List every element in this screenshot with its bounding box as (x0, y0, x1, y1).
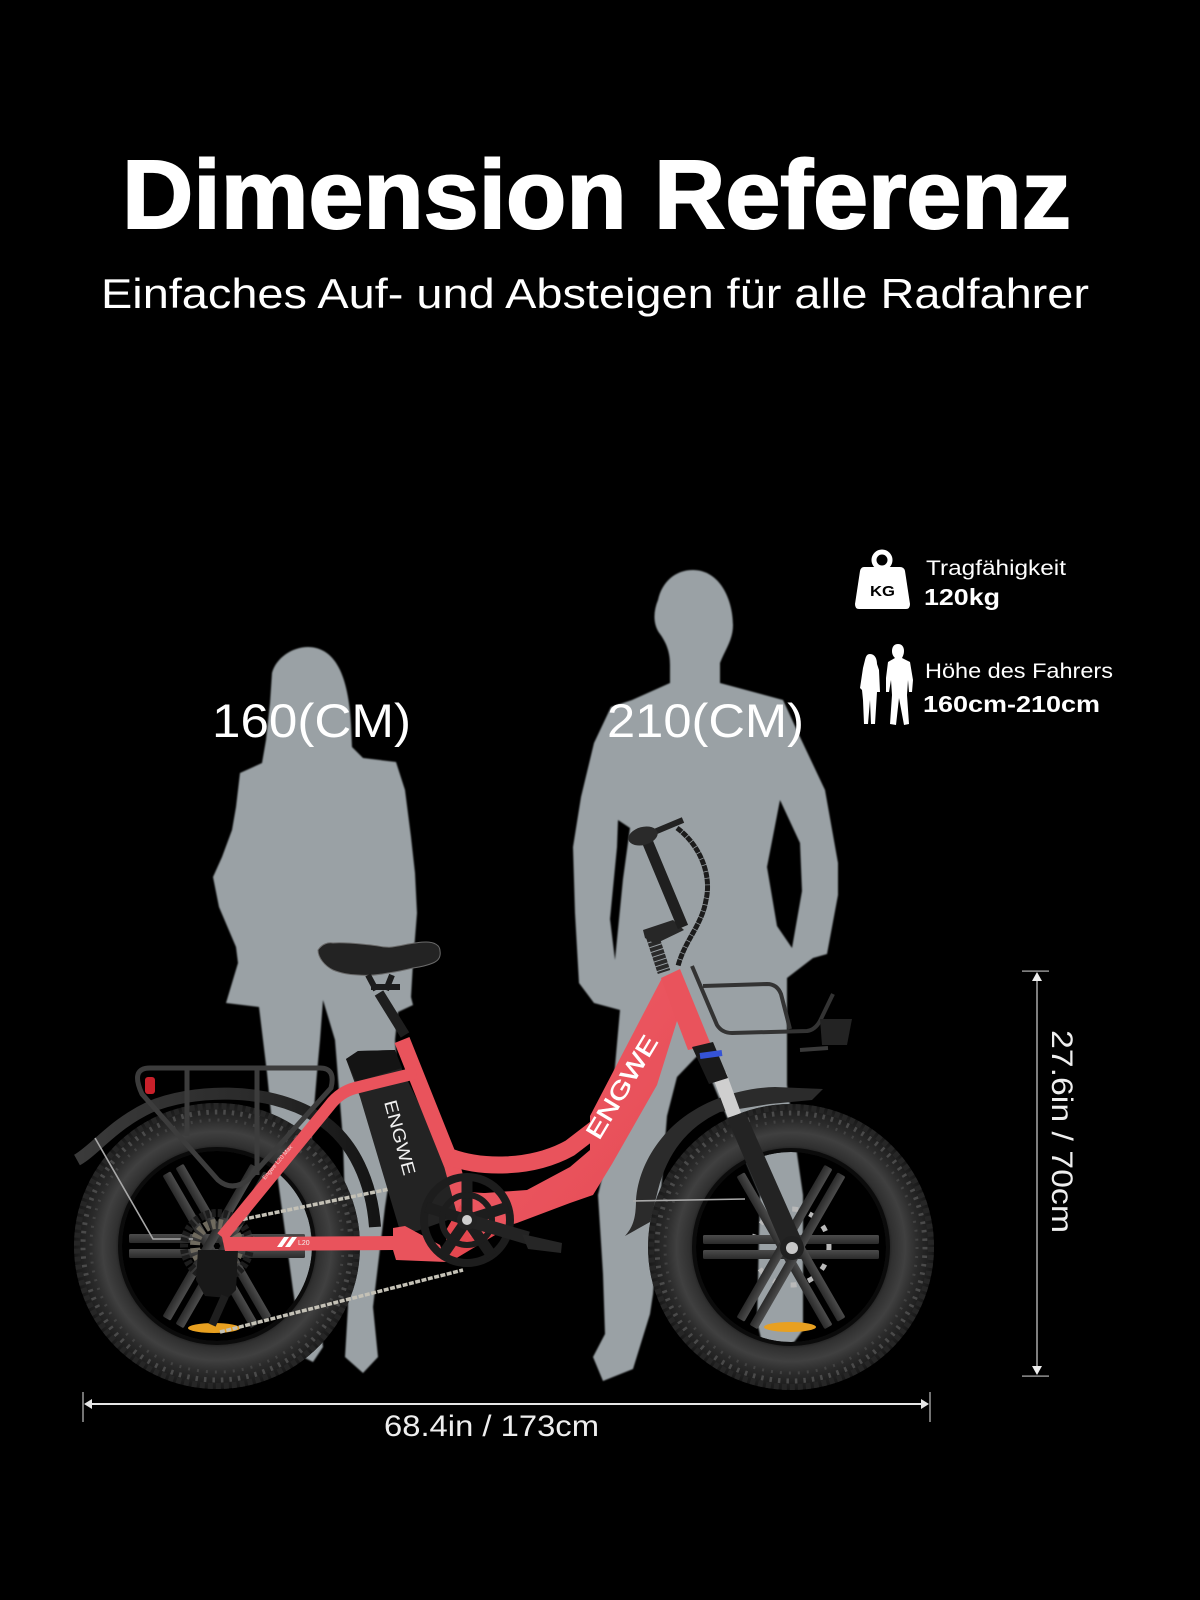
label: Tragfähigkeit: Tragfähigkeit (926, 557, 1066, 580)
saddle (318, 942, 440, 990)
crank arm (467, 1220, 528, 1238)
value: 160cm-210cm: 160cm-210cm (923, 691, 1100, 717)
seat tube (402, 1040, 467, 1220)
headlight (800, 1019, 852, 1050)
brake disc (753, 1209, 829, 1285)
height value: 27.6in / 70cm (1045, 1030, 1078, 1233)
silhouette: man 210 cm (573, 570, 838, 1381)
fork (692, 1042, 804, 1260)
stem (651, 932, 664, 972)
frame (222, 969, 711, 1262)
icon: weight: KG (870, 583, 895, 600)
spec: load capacity (855, 552, 1066, 610)
fender stays (95, 1138, 745, 1239)
top rear tube (222, 1073, 416, 1237)
upper curved tube (450, 1125, 600, 1165)
rear wheel (77, 1106, 357, 1386)
spec: rider height (860, 644, 1113, 725)
crankset (424, 1177, 562, 1263)
battery logo: ENGWE (380, 1098, 419, 1177)
rear fender (77, 1094, 375, 1227)
subtitle: Einfaches Auf- und Absteigen für alle Radfahrer (101, 270, 1089, 317)
label: Höhe des Fahrers: Höhe des Fahrers (925, 660, 1113, 683)
e-bike (77, 820, 931, 1387)
icon: weight (855, 552, 910, 609)
cassette (184, 1213, 250, 1279)
chain stay (222, 1236, 393, 1251)
dimension: height (1022, 970, 1078, 1377)
icon: rider silhouettes (860, 644, 913, 725)
main down tube (458, 975, 682, 1237)
label: 160 cm: 160(CM) (212, 694, 411, 747)
stem clamp (643, 920, 684, 944)
chain (220, 1175, 463, 1332)
dimension: length (82, 1392, 930, 1443)
length value: 68.4in / 173cm (384, 1410, 599, 1443)
seat post (379, 993, 405, 1035)
rear rack (138, 1068, 332, 1186)
value: 120kg: 120kg (924, 584, 1000, 610)
title: Dimension Referenz (122, 140, 1071, 249)
rear derailleur (196, 1250, 238, 1325)
front rack (692, 966, 833, 1033)
battery (346, 1050, 462, 1231)
handlebar grip and controls (626, 820, 683, 849)
front wheel (651, 1107, 931, 1387)
crank backing plate (445, 1192, 515, 1262)
tail light (145, 1077, 155, 1094)
blue ring (700, 1053, 722, 1056)
silhouette: woman 160 cm (213, 647, 417, 1373)
reflectors (188, 1322, 816, 1333)
pedal (522, 1234, 562, 1253)
length arrow line (82, 1392, 930, 1422)
frame logo: ENGWE (581, 1031, 664, 1144)
label: 210 cm: 210(CM) (607, 694, 804, 747)
tube label: Engwe L20 Max (262, 1144, 294, 1181)
height arrow line (1022, 970, 1049, 1377)
brake cable (677, 828, 708, 966)
stay marks (277, 1237, 297, 1247)
front fender (625, 1087, 823, 1236)
model label: L20 (298, 1240, 310, 1247)
handlebar post (648, 843, 683, 927)
head tube (661, 969, 711, 1050)
motor bracket (393, 1226, 446, 1262)
